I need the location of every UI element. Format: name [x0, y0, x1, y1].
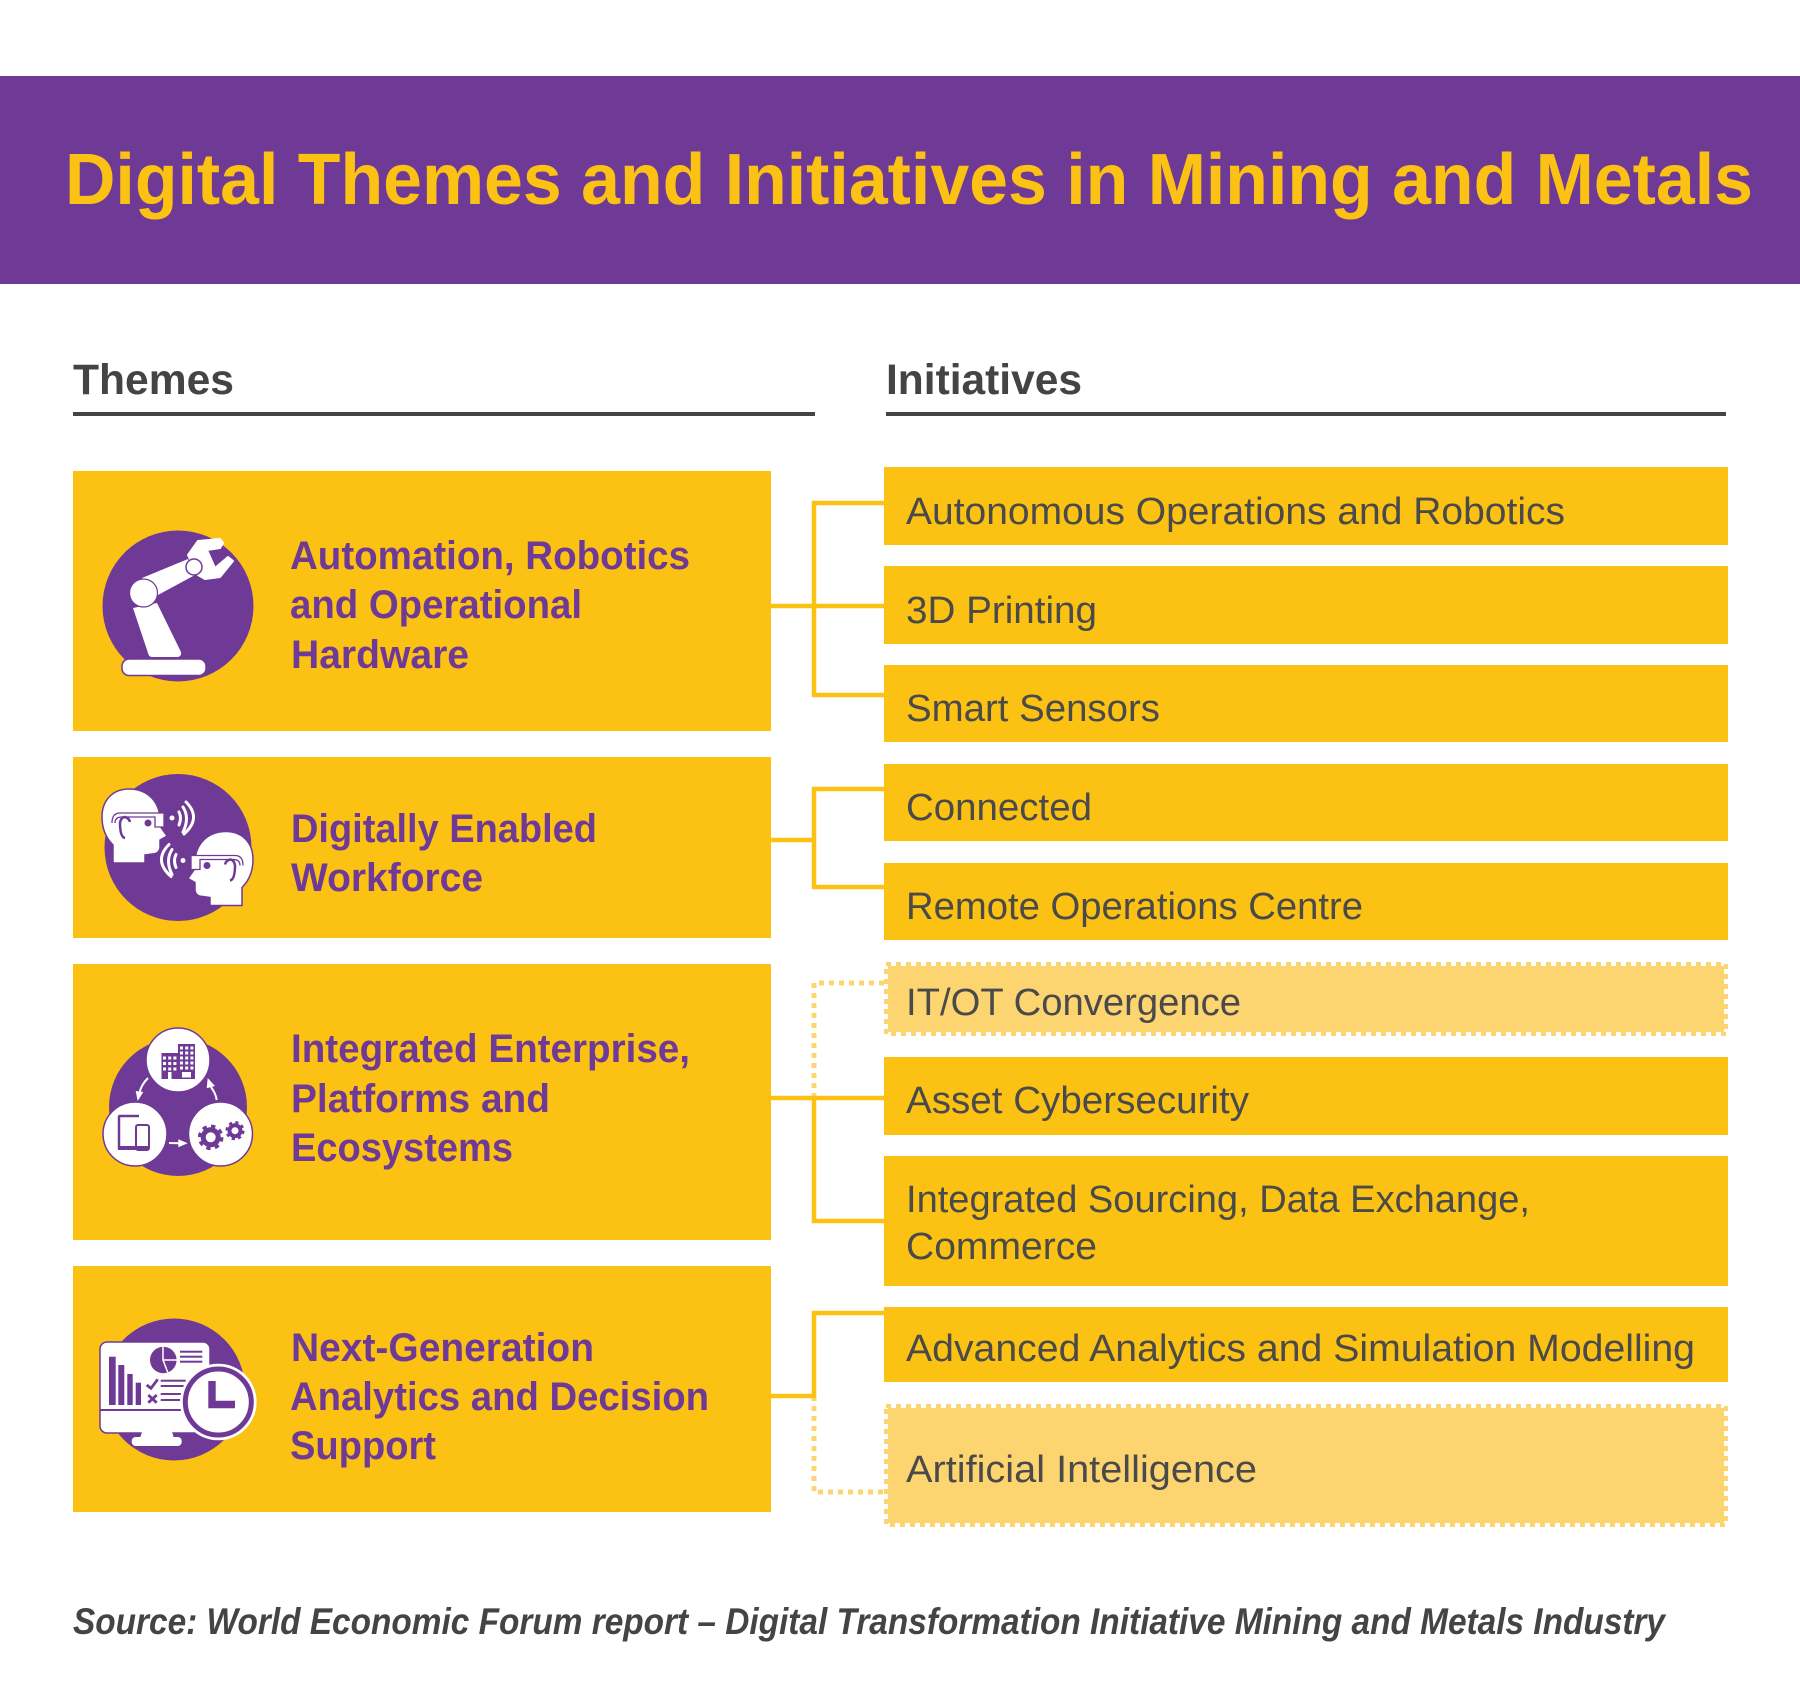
connector: theme 2 — [771, 789, 884, 887]
connector: theme 3 — [771, 983, 884, 1221]
initiative: Remote Operations Centre — [884, 863, 1728, 940]
initiative: Autonomous Operations and Robotics — [884, 467, 1728, 545]
icon: monitor with dashboard and clock — [100, 1318, 257, 1460]
panel: theme automation — [73, 471, 771, 731]
theme label: Support — [290, 1424, 436, 1468]
initiative: Integrated Sourcing, Data Exchange, Commerce: Integrated Sourcing, Data Exchange, — [906, 1179, 1530, 1221]
column heading: themes — [73, 356, 815, 416]
panel: theme workforce — [73, 757, 771, 938]
initiative: Artificial Intelligence (dotted) — [886, 1406, 1726, 1525]
initiative: Asset Cybersecurity: Asset Cybersecurity — [906, 1080, 1249, 1122]
initiative: Connected: Connected — [906, 787, 1092, 829]
initiative: Connected — [884, 764, 1728, 841]
initiative: 3D Printing — [884, 566, 1728, 644]
theme label: Analytics and Decision — [290, 1375, 709, 1419]
theme label: Platforms and — [291, 1077, 550, 1121]
theme label — [291, 1027, 690, 1170]
source note: Source: World Economic Forum report – Digital Transformation Initiative Mining and Metals Industry — [73, 1601, 1667, 1642]
icon: two heads with smart glasses — [102, 774, 253, 921]
initiative: Integrated Sourcing, Data Exchange, Commerce — [884, 1156, 1728, 1286]
connector: theme 1 — [771, 503, 884, 695]
initiative: Advanced Analytics and Simulation Modelling — [884, 1307, 1728, 1382]
initiative: IT/OT Convergence (dotted): IT/OT Convergence — [906, 982, 1241, 1024]
initiative: Integrated Sourcing, Data Exchange, Commerce: Commerce — [906, 1226, 1097, 1268]
icon: connected enterprise cycle — [103, 1028, 252, 1176]
panel: theme analytics — [73, 1266, 771, 1512]
theme label: Automation, Robotics — [290, 534, 690, 578]
connector: theme 4 — [771, 1313, 884, 1492]
initiative: Remote Operations Centre: Remote Operations Centre — [906, 886, 1363, 928]
header banner — [0, 76, 1800, 284]
column heading: initiatives: Initiatives — [886, 356, 1082, 404]
initiative: IT/OT Convergence (dotted) — [886, 964, 1726, 1034]
initiative: Smart Sensors — [884, 665, 1728, 742]
theme label: Workforce — [291, 856, 483, 900]
initiative: Advanced Analytics and Simulation Modelling: Advanced Analytics and Simulation Modelling — [906, 1328, 1695, 1370]
theme label — [290, 1326, 709, 1468]
icon: robot arm — [102, 530, 254, 682]
initiative: Smart Sensors: Smart Sensors — [906, 688, 1160, 730]
theme label: Digitally Enabled — [291, 807, 597, 851]
column heading: initiatives — [886, 356, 1726, 416]
theme label: Hardware — [291, 633, 469, 677]
theme label — [290, 534, 690, 677]
initiative: 3D Printing: 3D Printing — [906, 590, 1097, 632]
theme label: Integrated Enterprise, — [291, 1027, 690, 1071]
initiative: Autonomous Operations and Robotics: Autonomous Operations and Robotics — [906, 491, 1565, 533]
theme label: Next-Generation — [291, 1326, 594, 1370]
theme label — [291, 807, 597, 900]
theme label: and Operational — [290, 583, 582, 627]
title: Digital Themes and Initiatives in Mining and Metals — [65, 140, 1753, 220]
initiative: Artificial Intelligence (dotted): Artificial Intelligence — [906, 1449, 1257, 1491]
column heading: themes: Themes — [73, 356, 234, 404]
initiative: Asset Cybersecurity — [884, 1057, 1728, 1135]
theme label: Ecosystems — [291, 1126, 513, 1170]
panel: theme enterprise — [73, 964, 771, 1240]
